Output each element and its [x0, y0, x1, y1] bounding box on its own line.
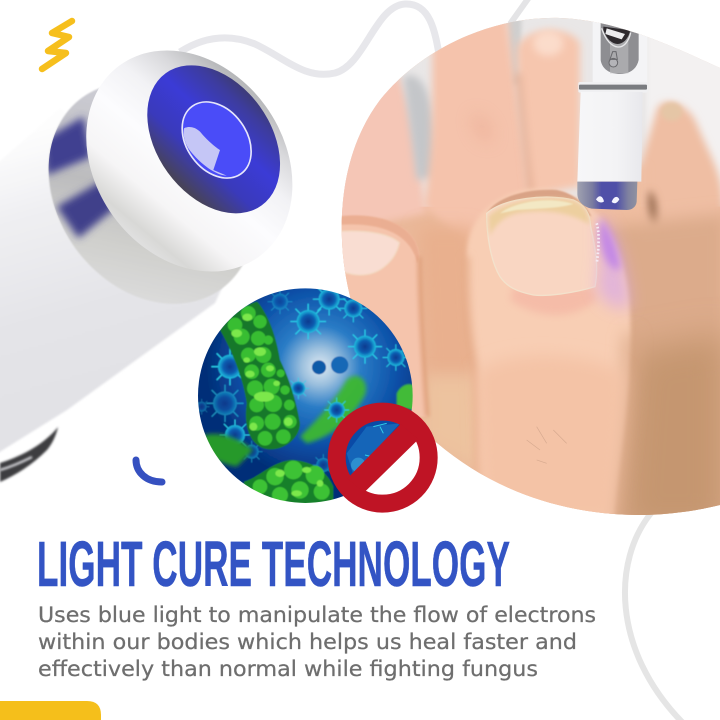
blue ring [120, 40, 308, 239]
description text: effectively than normal while fighting fungus [38, 657, 538, 682]
device lower metal ring [0, 427, 58, 482]
decorative top right line [510, 0, 530, 24]
pen device [577, 17, 648, 210]
main lumpy rod [220, 302, 300, 449]
foot skin background layers [333, 0, 720, 533]
bacteria circle [193, 283, 417, 507]
device body [0, 108, 230, 482]
description text: Uses blue light to manipulate the flow of electrons [38, 603, 596, 628]
decorative cable line [180, 4, 440, 74]
icon: yellow lightning [42, 21, 72, 69]
lens cap face [44, 10, 335, 312]
green bacteria rods [300, 376, 366, 443]
inner lens [168, 89, 265, 191]
bacteria and prohibition illustration [193, 283, 430, 507]
decorative large circle outline [625, 512, 682, 720]
icon: device lens head [48, 50, 292, 304]
description text [38, 603, 596, 682]
big toenail [487, 197, 597, 295]
virus particles [194, 283, 409, 476]
white lower half [366, 442, 420, 495]
red ring and bar [337, 412, 429, 504]
prohibition sign [337, 412, 430, 507]
bottom green cluster [244, 460, 333, 507]
big toe [466, 189, 631, 533]
description text: within our bodies which helps us heal faster and [38, 630, 577, 655]
yellow corner tab [0, 701, 101, 720]
inner lens of sign: bacteria view [346, 420, 408, 476]
small left toe [337, 215, 427, 417]
icon: blue arc [136, 460, 162, 482]
photo: device on toenail [330, 0, 720, 533]
rear metal band [48, 88, 243, 304]
lens highlight [184, 127, 227, 176]
dark blue behind sign [340, 413, 413, 487]
